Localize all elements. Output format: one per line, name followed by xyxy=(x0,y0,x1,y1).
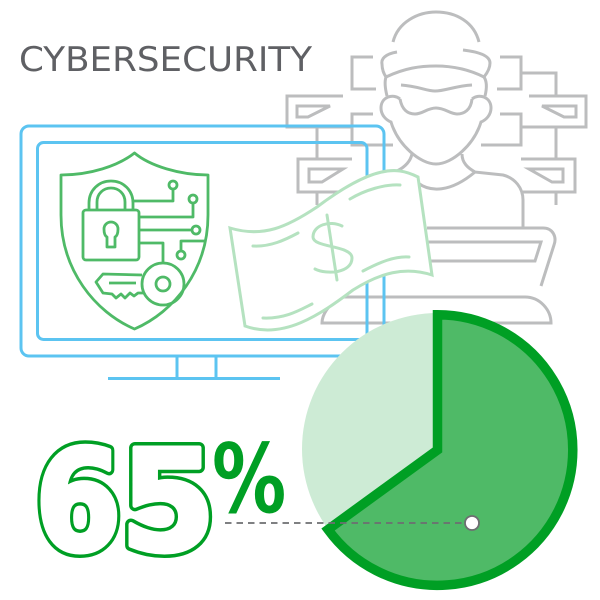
big number: 65: 5 xyxy=(120,420,216,583)
icon: computer monitor xyxy=(21,126,384,378)
big number: 65 xyxy=(35,420,216,584)
icon: security shield with lock and key xyxy=(61,153,208,329)
icon: circuit boxes xyxy=(287,57,586,205)
illustration: hacker at laptop xyxy=(287,12,586,323)
icon: laptop xyxy=(322,228,555,323)
big number: 65: 5 xyxy=(120,420,216,583)
percent sign: % xyxy=(212,425,286,535)
icon: padlock xyxy=(83,181,139,260)
icon: dollar bill xyxy=(230,171,432,330)
icon: key xyxy=(96,263,184,305)
big number: 65: 6 xyxy=(35,421,122,584)
icon: circuit traces xyxy=(133,181,205,262)
pie chart: 65 percent xyxy=(302,313,574,585)
icon: hacker body xyxy=(397,154,523,228)
icon: hacker head xyxy=(381,12,491,164)
big number: 65: 6 xyxy=(35,421,122,584)
callout: dashed leader line and marker xyxy=(225,516,479,530)
title: CYBERSECURITY xyxy=(19,40,312,80)
